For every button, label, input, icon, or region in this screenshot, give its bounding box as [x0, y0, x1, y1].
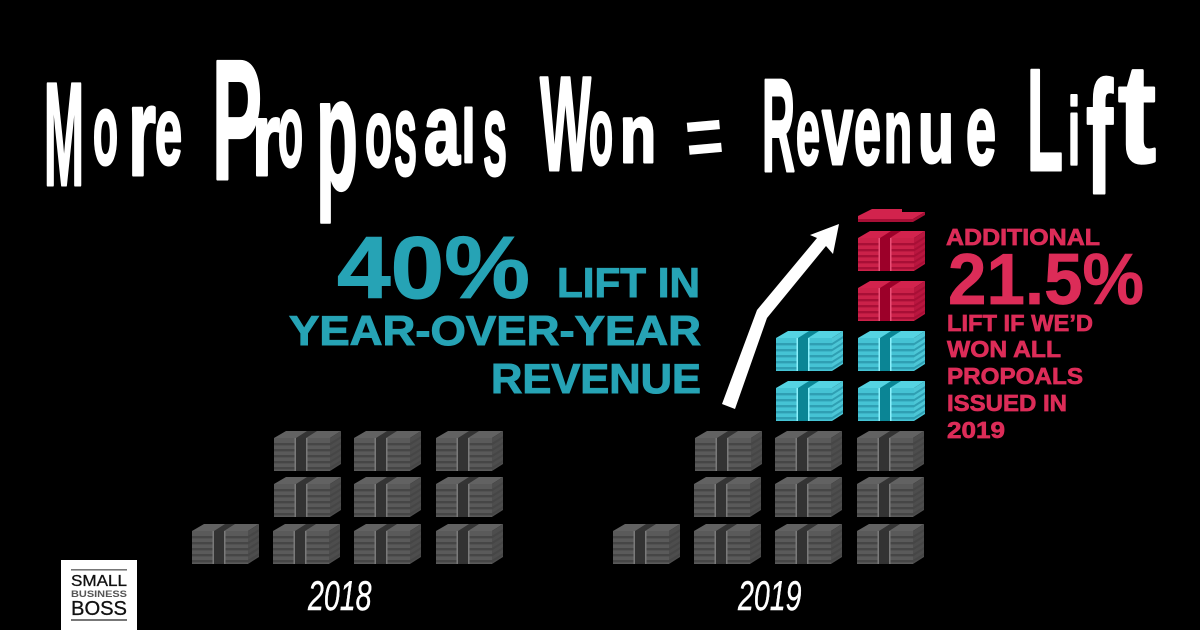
- title: f: [1086, 48, 1113, 227]
- callout: additional 21.5%: ISSUED IN: [947, 390, 1067, 416]
- logo: Small Business Boss: BOSS: [71, 598, 127, 620]
- money stacks: 2018: [192, 431, 503, 564]
- title: u: [918, 82, 954, 182]
- title: P: [212, 25, 262, 216]
- callout: additional 21.5%: WON ALL: [947, 336, 1061, 362]
- callout: additional 21.5%: 21.5%: [948, 240, 1144, 320]
- title: n: [884, 82, 912, 182]
- title: W: [540, 50, 591, 199]
- title: t: [1118, 35, 1156, 192]
- title: v: [822, 74, 853, 186]
- callout: 40% lift: 40%: [337, 218, 530, 317]
- arrow: [722, 224, 839, 409]
- title: o: [278, 73, 303, 188]
- title: a: [424, 74, 461, 186]
- title: o: [93, 74, 118, 186]
- title: [44, 25, 1156, 227]
- title: e: [155, 78, 182, 185]
- money stacks: 2019 red potential: [858, 209, 925, 321]
- money stacks: 2019 base: [613, 431, 924, 564]
- title: s: [483, 69, 507, 200]
- callout: additional 21.5%: [946, 224, 1144, 443]
- callout: additional 21.5%: LIFT IF WE’D: [947, 310, 1093, 336]
- title: R: [762, 52, 795, 199]
- title: r: [128, 61, 156, 202]
- callout: 40% lift: YEAR-OVER-YEAR: [289, 307, 701, 354]
- title: i: [1068, 79, 1080, 185]
- callout: additional 21.5%: PROPOALS: [947, 363, 1083, 389]
- logo: Small Business Boss: BUSINESS: [71, 589, 127, 600]
- callout: 40% lift: REVENUE: [491, 355, 701, 402]
- title: o: [365, 80, 392, 187]
- title: M: [44, 53, 84, 217]
- title: n: [620, 89, 656, 180]
- title: e: [966, 74, 996, 186]
- logo: Small Business Boss: SMALL: [71, 573, 127, 590]
- title: l: [462, 95, 475, 178]
- callout: 40% lift: LIFT IN: [557, 259, 700, 306]
- logo: Small Business Boss: [61, 560, 137, 630]
- title: L: [1027, 39, 1063, 201]
- title: e: [854, 74, 881, 186]
- title: s: [394, 69, 417, 200]
- label: 2018: 2018: [307, 571, 372, 619]
- title: p: [316, 44, 358, 223]
- title: =: [681, 87, 727, 185]
- label: 2019: 2019: [737, 571, 802, 619]
- callout: additional 21.5%: 2019: [947, 417, 1005, 443]
- title: e: [796, 78, 820, 185]
- title: o: [589, 78, 613, 185]
- callout: additional 21.5%: ADDITIONAL: [946, 224, 1100, 250]
- callout: 40% lift: [289, 218, 701, 402]
- title: r: [252, 81, 280, 198]
- money stacks: 2019 teal lift: [776, 331, 925, 421]
